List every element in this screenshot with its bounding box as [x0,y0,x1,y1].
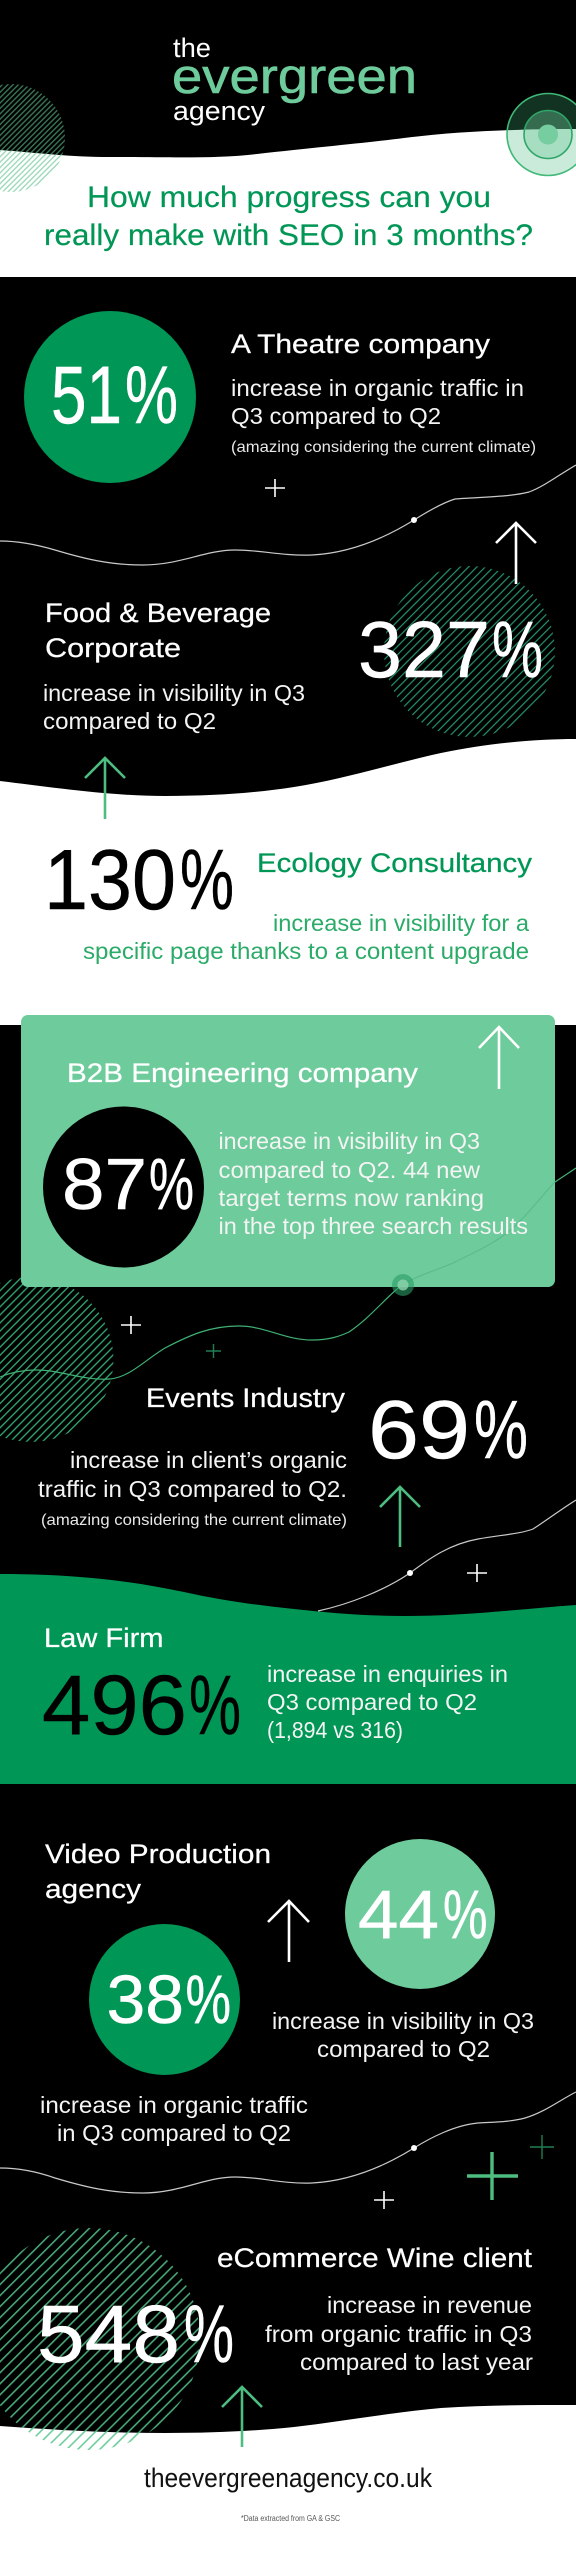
hatched circle: ecommerce [0,2228,200,2450]
panel: events industry [38,1383,528,1529]
footnote: *Data extracted from GA & GSC [241,2514,340,2523]
hatched circle: 327 [384,566,555,737]
panel: law firm: increase in enquiries in [267,1661,508,1687]
panel: ecommerce wine client [37,2243,533,2380]
b2b card content: 87 [62,1145,147,1225]
panel: video production agency [40,1839,534,2146]
panel: ecommerce wine client: compared to last year [300,2349,533,2375]
panel: video production agency: 44 [358,1876,439,1953]
panel: theatre company: 51 [51,350,122,441]
panel: law firm: (1,894 vs 316) [267,1717,403,1743]
trend line 1 [0,465,576,565]
panel: ecommerce wine client: eCommerce Wine client [217,2243,533,2273]
icon: green up arrow [380,1487,420,1547]
b2b card content: increase in visibility in Q3 [218,1128,480,1154]
panel: law firm: Law Firm [44,1623,164,1653]
b2b card content: % [149,1145,194,1225]
b2b card content: B2B Engineering company [67,1058,419,1088]
hatched circle: events [0,1277,114,1442]
panel: food and beverage: 327 [358,605,490,694]
panel: food and beverage: increase in visibility in Q3 [43,680,305,706]
title: How much progress can you [87,181,491,214]
header white wave band [0,129,576,277]
footer white wave [0,2405,576,2560]
panel: food and beverage: Food & Beverage [45,598,271,628]
icon: small green plus [206,1344,221,1358]
icon: plus [121,1316,141,1334]
panel: events industry: 69 [368,1383,470,1476]
panel: ecology consultancy: Ecology Consultancy [257,848,533,878]
panel: ecology consultancy [44,833,533,964]
icon: plus [374,2191,394,2209]
panel: theatre company: (amazing considering the current climate) [231,439,536,456]
logo: the [173,33,211,63]
title [44,181,533,252]
panel: law firm: 496 [42,1658,187,1752]
panel: ecology consultancy: increase in visibility for a [273,910,529,936]
trend line 2 [0,1168,576,1379]
panel: ecology consultancy: specific page thanks to a content upgrade [83,938,529,964]
panel: theatre company: A Theatre company [231,329,491,359]
icon: green up arrow [222,2387,262,2447]
b2b card content: compared to Q2. 44 new [218,1157,480,1183]
trend line 3 [318,1500,576,1611]
icon: plus [265,479,285,497]
panel: video production agency: 38 [106,1961,184,2038]
icon: plus [467,1564,487,1582]
b2b card content [43,1027,528,1268]
panel: video production agency: in Q3 compared to Q2 [57,2120,291,2146]
panel: theatre company [24,311,536,483]
panel: ecommerce wine client: 548 [37,2289,180,2380]
panel: ecology consultancy: 130 [44,833,176,928]
panel: food and beverage: Corporate [45,633,181,663]
panel: events industry: (amazing considering the current climate) [41,1512,347,1529]
footer url: theevergreenagency.co.uk [144,2463,432,2493]
icon: large green plus [467,2152,518,2200]
panel: video production agency: increase in visibility in Q3 [272,2008,534,2034]
panel: events industry: Events Industry [146,1383,346,1413]
panel: ecommerce wine client: % [184,2289,234,2380]
panel: events industry: % [474,1383,528,1476]
panel: video production agency: compared to Q2 [317,2036,490,2062]
panel: video production agency: % [443,1876,488,1953]
icon: green up arrow [85,758,125,819]
b2b card content: in the top three search results [218,1213,528,1239]
panel: law firm: % [189,1658,241,1752]
panel: b2b engineering card [21,1015,555,1287]
panel: theatre company: increase in organic traffic in [231,375,524,401]
logo: evergreen [172,50,417,104]
icon: white up arrow [496,523,536,584]
panel: events industry: increase in client’s organic [70,1447,347,1473]
hatched circle: header [0,84,65,192]
panel: food and beverage: compared to Q2 [43,708,216,734]
panel: food and beverage [43,598,543,734]
panel: theatre company: % [125,350,178,441]
logo: agency [173,96,266,126]
panel: ecommerce wine client: from organic traffic in Q3 [265,2321,532,2347]
panel: video production agency: Video Production [45,1839,271,1869]
panel: law firm [0,1574,576,1784]
panel: ecology consultancy: % [180,833,234,928]
trend line 4 [0,2092,576,2193]
panel: events industry: traffic in Q3 compared to Q2. [38,1476,347,1502]
title: really make with SEO in 3 months? [44,219,533,252]
white section [0,739,576,1025]
icon: concentric target [507,94,576,176]
icon: dark green plus [530,2135,554,2159]
panel: food and beverage: % [492,605,543,694]
panel: video production agency: agency [45,1874,142,1904]
panel: theatre company: Q3 compared to Q2 [231,403,441,429]
panel: law firm: Q3 compared to Q2 [267,1689,477,1715]
b2b card content: target terms now ranking [218,1185,484,1211]
panel: video production agency: increase in organic traffic [40,2092,308,2118]
logo [172,33,417,126]
panel: ecommerce wine client: increase in revenue [327,2292,532,2318]
panel: video production agency: % [186,1961,231,2038]
